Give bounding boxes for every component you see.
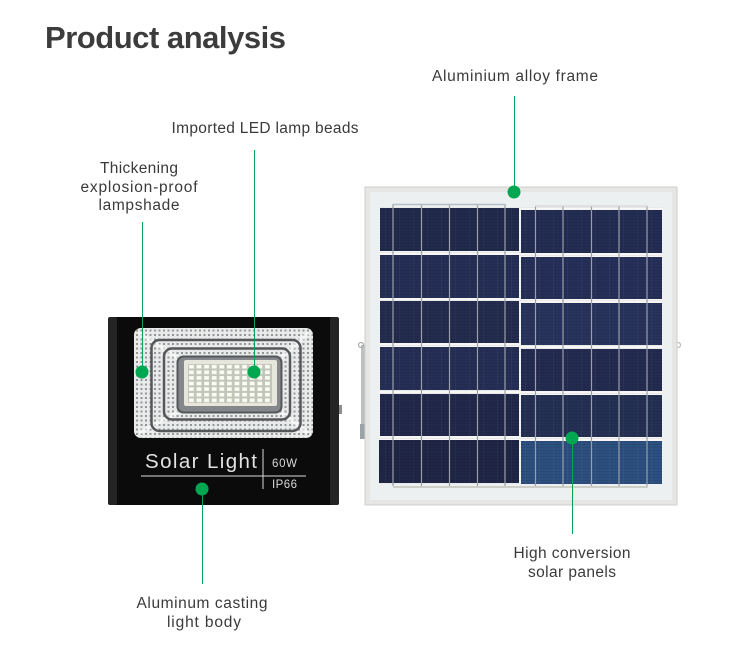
- callout: lampshade: explosion-proof: [80, 179, 198, 196]
- cell grid: [379, 207, 663, 484]
- product text: [141, 449, 306, 491]
- callout: lampshade: [80, 160, 198, 378]
- callout: solar panels: [514, 432, 630, 581]
- side rails: [108, 317, 342, 505]
- callout: LED lamp beads: Imported LED lamp beads: [172, 120, 359, 137]
- bus wires: [393, 204, 648, 487]
- LED lamp beads: [184, 360, 277, 406]
- product text: Solar Light: [145, 450, 257, 473]
- product text: 60W: [272, 458, 297, 470]
- callout: solar panels: High conversion: [514, 545, 630, 562]
- light body: [108, 317, 339, 505]
- callout: LED lamp beads: [172, 120, 359, 378]
- floodlight: [108, 317, 342, 505]
- callout: aluminium alloy frame: Aluminium alloy frame: [432, 68, 598, 85]
- callout: light body: Aluminum casting: [136, 595, 268, 612]
- aluminium frame: [365, 187, 677, 505]
- white backing: [370, 192, 672, 500]
- callout: aluminium alloy frame: [432, 68, 598, 198]
- lampshade reflector: [134, 328, 313, 438]
- panel: mounting bracket: [358, 342, 680, 439]
- callout: lampshade: Thickening: [100, 160, 178, 177]
- product text: IP66: [272, 479, 297, 491]
- callout: light body: light body: [167, 614, 241, 631]
- title: Product analysis: [45, 20, 286, 55]
- callout: solar panels: solar panels: [528, 564, 616, 581]
- callout: lampshade: lampshade: [98, 197, 180, 214]
- callout: light body: [136, 482, 268, 631]
- solar panel: [358, 187, 680, 505]
